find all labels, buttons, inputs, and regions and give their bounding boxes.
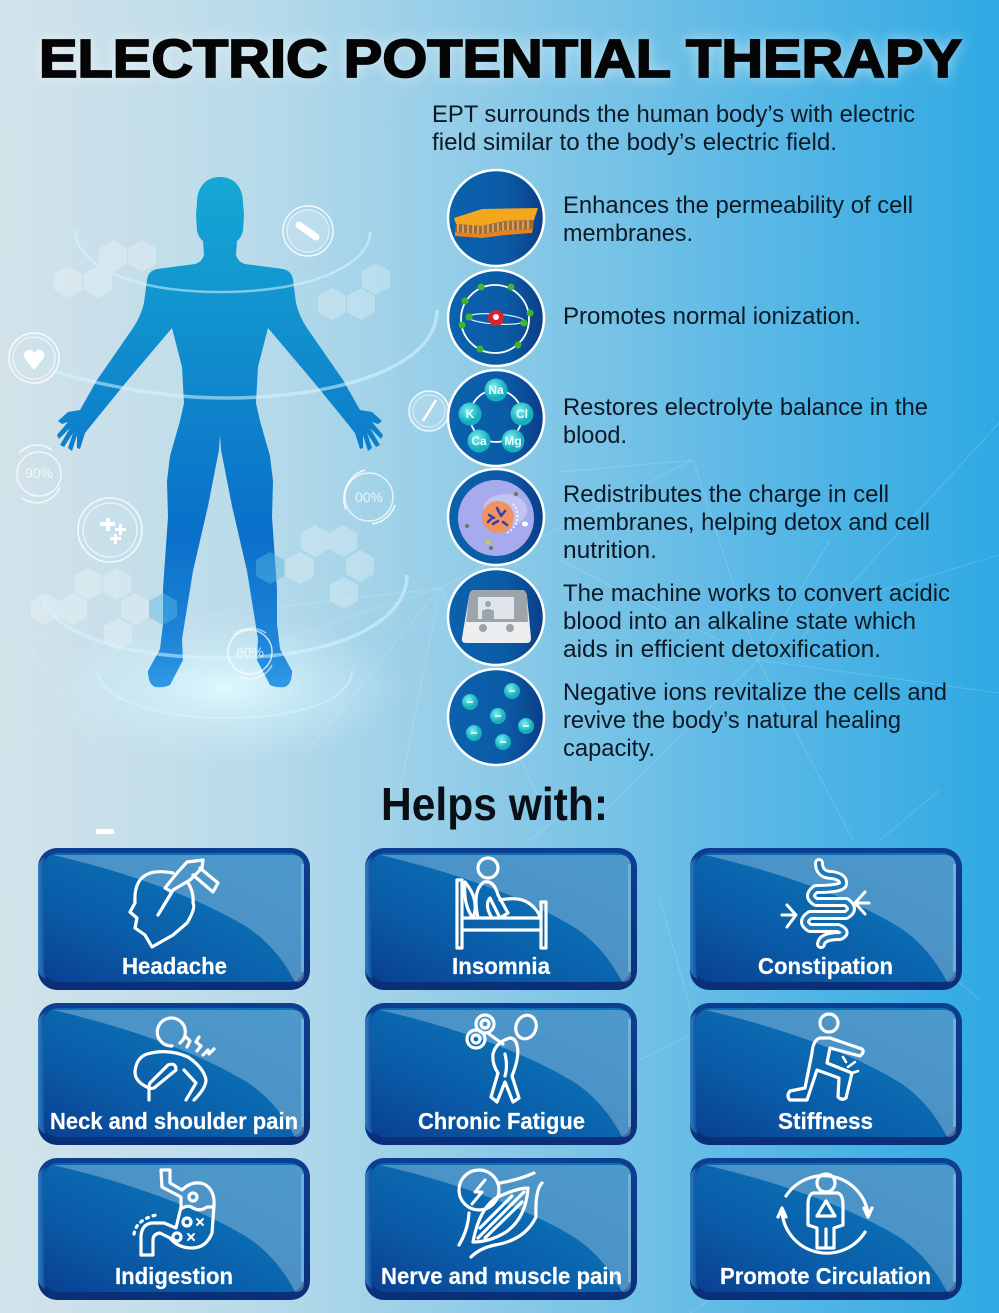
icon: head with hammer (130, 860, 218, 947)
panel: promote circulation (690, 1158, 962, 1300)
icon: 00 percent gauge: 00% (355, 489, 383, 505)
icon: 60 percent gauge (228, 628, 272, 679)
panel: constipation (690, 848, 962, 990)
panel: indigestion: Indigestion (115, 1263, 233, 1289)
text: negative ions: revive the body’s natural healing (563, 707, 901, 734)
text: membranes: membranes. (563, 220, 693, 247)
icon: negative ions (448, 669, 544, 765)
leg hexagon overlay (149, 552, 284, 625)
panel: chronic fatigue: Chronic Fatigue (418, 1108, 585, 1134)
icon: cell membrane (448, 170, 544, 266)
intro text (432, 101, 915, 156)
text: alkaline blood (563, 580, 950, 663)
panel: insomnia: Insomnia (452, 953, 551, 979)
icon: stomach (134, 1170, 214, 1255)
text: alkaline blood: blood into an alkaline state which (563, 608, 916, 635)
icon: circulation around person (778, 1174, 872, 1253)
icon: pill badge (283, 206, 333, 256)
icon: muscle and nerve (459, 1170, 542, 1257)
hexagon cluster backdrop (31, 240, 390, 650)
icon: electrolytes: Ca (471, 434, 487, 448)
text: charge redistribution: nutrition. (563, 537, 657, 564)
text: alkaline blood: aids in efficient detoxification. (563, 636, 881, 663)
icon: electrolytes: Cl (516, 407, 528, 421)
text: negative ions: capacity. (563, 735, 655, 762)
human body silhouette (57, 177, 383, 687)
panel: headache (38, 848, 310, 990)
icon: 90 percent gauge: 90% (25, 465, 53, 481)
energy rings around body (43, 230, 437, 718)
panel: chronic fatigue (365, 1003, 637, 1145)
panel: stiffness: Stiffness (778, 1108, 873, 1134)
text: charge redistribution (563, 481, 930, 564)
icon: electrolytes (448, 370, 544, 466)
panel: headache: Headache (122, 953, 227, 979)
intro text: EPT surrounds the human body’s with electric (432, 101, 915, 128)
title: ELECTRIC POTENTIAL THERAPY (39, 29, 962, 89)
panel: promote circulation: Promote Circulation (720, 1263, 931, 1289)
text: electrolyte balance: Restores electrolyte balance in the (563, 394, 928, 421)
icon: atom (448, 270, 544, 366)
icon: shoulder pain (135, 1018, 214, 1100)
icon: heart badge (9, 333, 59, 383)
panel: insomnia (365, 848, 637, 990)
panel: neck and shoulder pain (38, 1003, 310, 1145)
icon: syringe badge (409, 391, 449, 431)
panel: constipation: Constipation (758, 953, 893, 979)
text: negative ions (563, 679, 947, 762)
panel: nerve and muscle pain (365, 1158, 637, 1300)
panel: neck and shoulder pain: Neck and shoulder pain (50, 1108, 298, 1134)
icon: person lifting weight (467, 1012, 540, 1102)
icon: person sitting in bed (457, 858, 546, 948)
text: charge redistribution: Redistributes the charge in cell (563, 481, 889, 508)
icon: kneeling person (788, 1014, 863, 1100)
icon: electrolytes: Na (488, 383, 504, 397)
icon: intestines (782, 863, 869, 944)
panel: nerve and muscle pain: Nerve and muscle pain (381, 1263, 622, 1289)
text: membranes (563, 192, 913, 247)
small dash mark (96, 829, 114, 834)
icon: 90 percent gauge (17, 445, 61, 503)
panel: indigestion (38, 1158, 310, 1300)
icon: electrolytes: K (466, 407, 475, 421)
text: negative ions: Negative ions revitalize the cells and (563, 679, 947, 706)
heading: helps with: Helps with: (381, 778, 608, 830)
text: alkaline blood: The machine works to convert acidic (563, 580, 950, 607)
icon: cell (448, 469, 544, 565)
icon: 60 percent gauge: 60% (236, 644, 264, 660)
text: ionization: Promotes normal ionization. (563, 303, 861, 330)
icon: EPT machine (448, 569, 544, 665)
panel: stiffness (690, 1003, 962, 1145)
text: charge redistribution: membranes, helping detox and cell (563, 509, 930, 536)
icon: 00 percent gauge (344, 470, 395, 524)
text: membranes: Enhances the permeability of cell (563, 192, 913, 219)
intro text: field similar to the body’s electric field. (432, 129, 837, 156)
text: electrolyte balance: blood. (563, 422, 627, 449)
icon: electrolytes: Mg (504, 434, 522, 448)
icon: plus signs badge (78, 498, 142, 562)
text: electrolyte balance (563, 394, 928, 449)
